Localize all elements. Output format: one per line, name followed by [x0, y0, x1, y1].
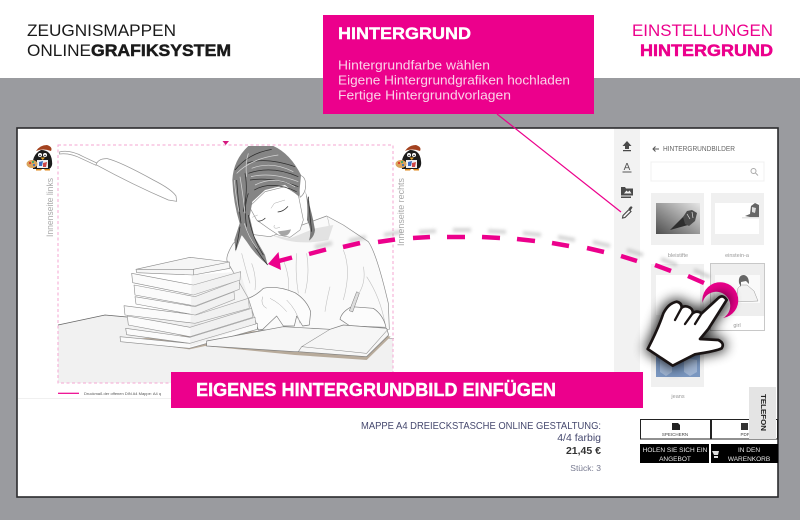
open notebook	[207, 325, 389, 357]
arrow: dashed curve to illustration	[268, 230, 710, 283]
thumbnail: jeans: jeans	[670, 394, 685, 400]
right hand and pen	[340, 307, 386, 327]
tab: Telefon: TELEFON	[759, 394, 768, 431]
thumbnail: einstein-a	[711, 193, 764, 259]
button: In den Warenkorb	[711, 444, 778, 463]
neck shading	[272, 225, 333, 242]
button: PDF: PDF	[740, 432, 750, 437]
list heading: HINTERGRUNDBILDER	[663, 146, 735, 153]
table surface	[58, 315, 393, 383]
tool icons	[621, 141, 633, 218]
button: In den Warenkorb: IN DEN	[738, 447, 760, 454]
dash shadows	[315, 230, 710, 277]
callout: Hintergrund: Hintergrundfarbe wählen	[338, 58, 490, 72]
label: Innenseite rechts: Innenseite rechts	[396, 178, 407, 246]
button: In den Warenkorb: WARENKORB	[728, 456, 770, 463]
button: Holen Sie sich ein Angebot	[640, 444, 709, 463]
icon: upload	[622, 141, 632, 151]
girl body and blouse	[227, 216, 389, 330]
hair mass	[232, 146, 301, 265]
leader line	[497, 114, 621, 212]
product summary text: 21,45 €	[566, 445, 601, 457]
heading: Einstellungen Hintergrund: HINTERGRUND	[640, 41, 773, 60]
dashed print frame	[58, 141, 393, 383]
shadow under books and notebook	[120, 327, 391, 360]
ear	[298, 175, 306, 197]
book stack	[120, 257, 257, 348]
icon: penguin painter left	[26, 145, 52, 170]
title: Zeugnismappen Onlinegrafiksystem: ONLINE	[27, 41, 91, 60]
hand shadow	[648, 296, 727, 365]
book right-side shading	[190, 272, 257, 347]
button: Speichern: SPEICHERN	[662, 432, 688, 437]
heading: Einstellungen Hintergrund: EINSTELLUNGEN	[632, 21, 773, 40]
panel: background image list	[651, 146, 764, 400]
button: Speichern	[640, 420, 710, 439]
desk lamp	[59, 151, 177, 201]
button: Holen Sie sich ein Angebot: ANGEBOT	[659, 456, 691, 463]
icon: pointing hand with click ring	[648, 282, 738, 366]
thumbnail: einstein-a: einstein-a	[725, 253, 750, 259]
product summary text	[361, 420, 601, 473]
left hand and sleeve	[248, 287, 311, 330]
face	[249, 187, 303, 237]
legend: print size note: Druckmaß der offenen DIN A4 Mappe: A4 q	[84, 391, 161, 396]
callout: Hintergrund: Fertige Hintergrundvorlagen	[338, 88, 511, 102]
title: Zeugnismappen Onlinegrafiksystem	[27, 21, 231, 60]
pink dashes	[277, 237, 704, 283]
product summary text: 4/4 farbig	[557, 432, 601, 444]
button: PDF	[712, 420, 778, 439]
callout: Hintergrund: HINTERGRUND	[338, 24, 471, 43]
thumbnail: girl selected	[710, 264, 764, 330]
thumbnail: bleistifte: bleistifte	[668, 253, 688, 259]
button: Holen Sie sich ein Angebot: HOLEN SIE SICH EIN	[643, 447, 708, 454]
icon: image folders	[621, 187, 633, 198]
click ring	[702, 282, 738, 318]
label: Innenseite links: Innenseite links	[45, 178, 56, 237]
title: Zeugnismappen Onlinegrafiksystem: GRAFIKSYSTEM	[91, 41, 231, 60]
banner: Eigenes Hintergrundbild einfügen: EIGENES HINTERGRUNDBILD EINFÜGEN	[196, 380, 556, 400]
product summary text: Stück: 3	[570, 463, 601, 473]
banner: Eigenes Hintergrundbild einfügen	[171, 372, 643, 408]
tab: Telefon	[749, 387, 776, 439]
upper scene: face and hair	[232, 146, 333, 265]
tool column	[614, 129, 640, 399]
hair dark strands	[235, 149, 312, 265]
thumbnail: third card	[651, 264, 704, 387]
icon: text colour A: A	[624, 162, 631, 173]
callout: Hintergrund	[323, 15, 594, 114]
arrowhead	[268, 252, 281, 270]
table edge right	[388, 337, 394, 339]
illustration: girl studying with books	[58, 146, 394, 383]
icon: eyedropper	[622, 206, 632, 218]
lower scene: body, books, notebook	[120, 216, 394, 360]
heading: Einstellungen Hintergrund	[632, 21, 773, 60]
title: Zeugnismappen Onlinegrafiksystem: ZEUGNISMAPPEN	[27, 21, 176, 40]
search box	[651, 162, 764, 181]
callout: Hintergrund: Eigene Hintergrundgrafiken hochladen	[338, 72, 570, 88]
panel: app screenshot	[17, 128, 778, 497]
hair light strands	[234, 153, 298, 248]
thumbnail: girl selected: girl	[733, 323, 741, 329]
icon: penguin painter right	[396, 145, 421, 170]
thumbnail: jeans	[656, 345, 700, 400]
blouse folds	[242, 216, 385, 323]
centre marker triangle	[222, 141, 229, 145]
thumbnail: bleistifte	[651, 193, 704, 259]
footer hairline	[18, 398, 618, 399]
hand outline	[648, 296, 727, 366]
product summary text: MAPPE A4 DREIECKSTASCHE ONLINE GESTALTUNG:	[361, 420, 601, 432]
back arrow	[653, 146, 659, 152]
